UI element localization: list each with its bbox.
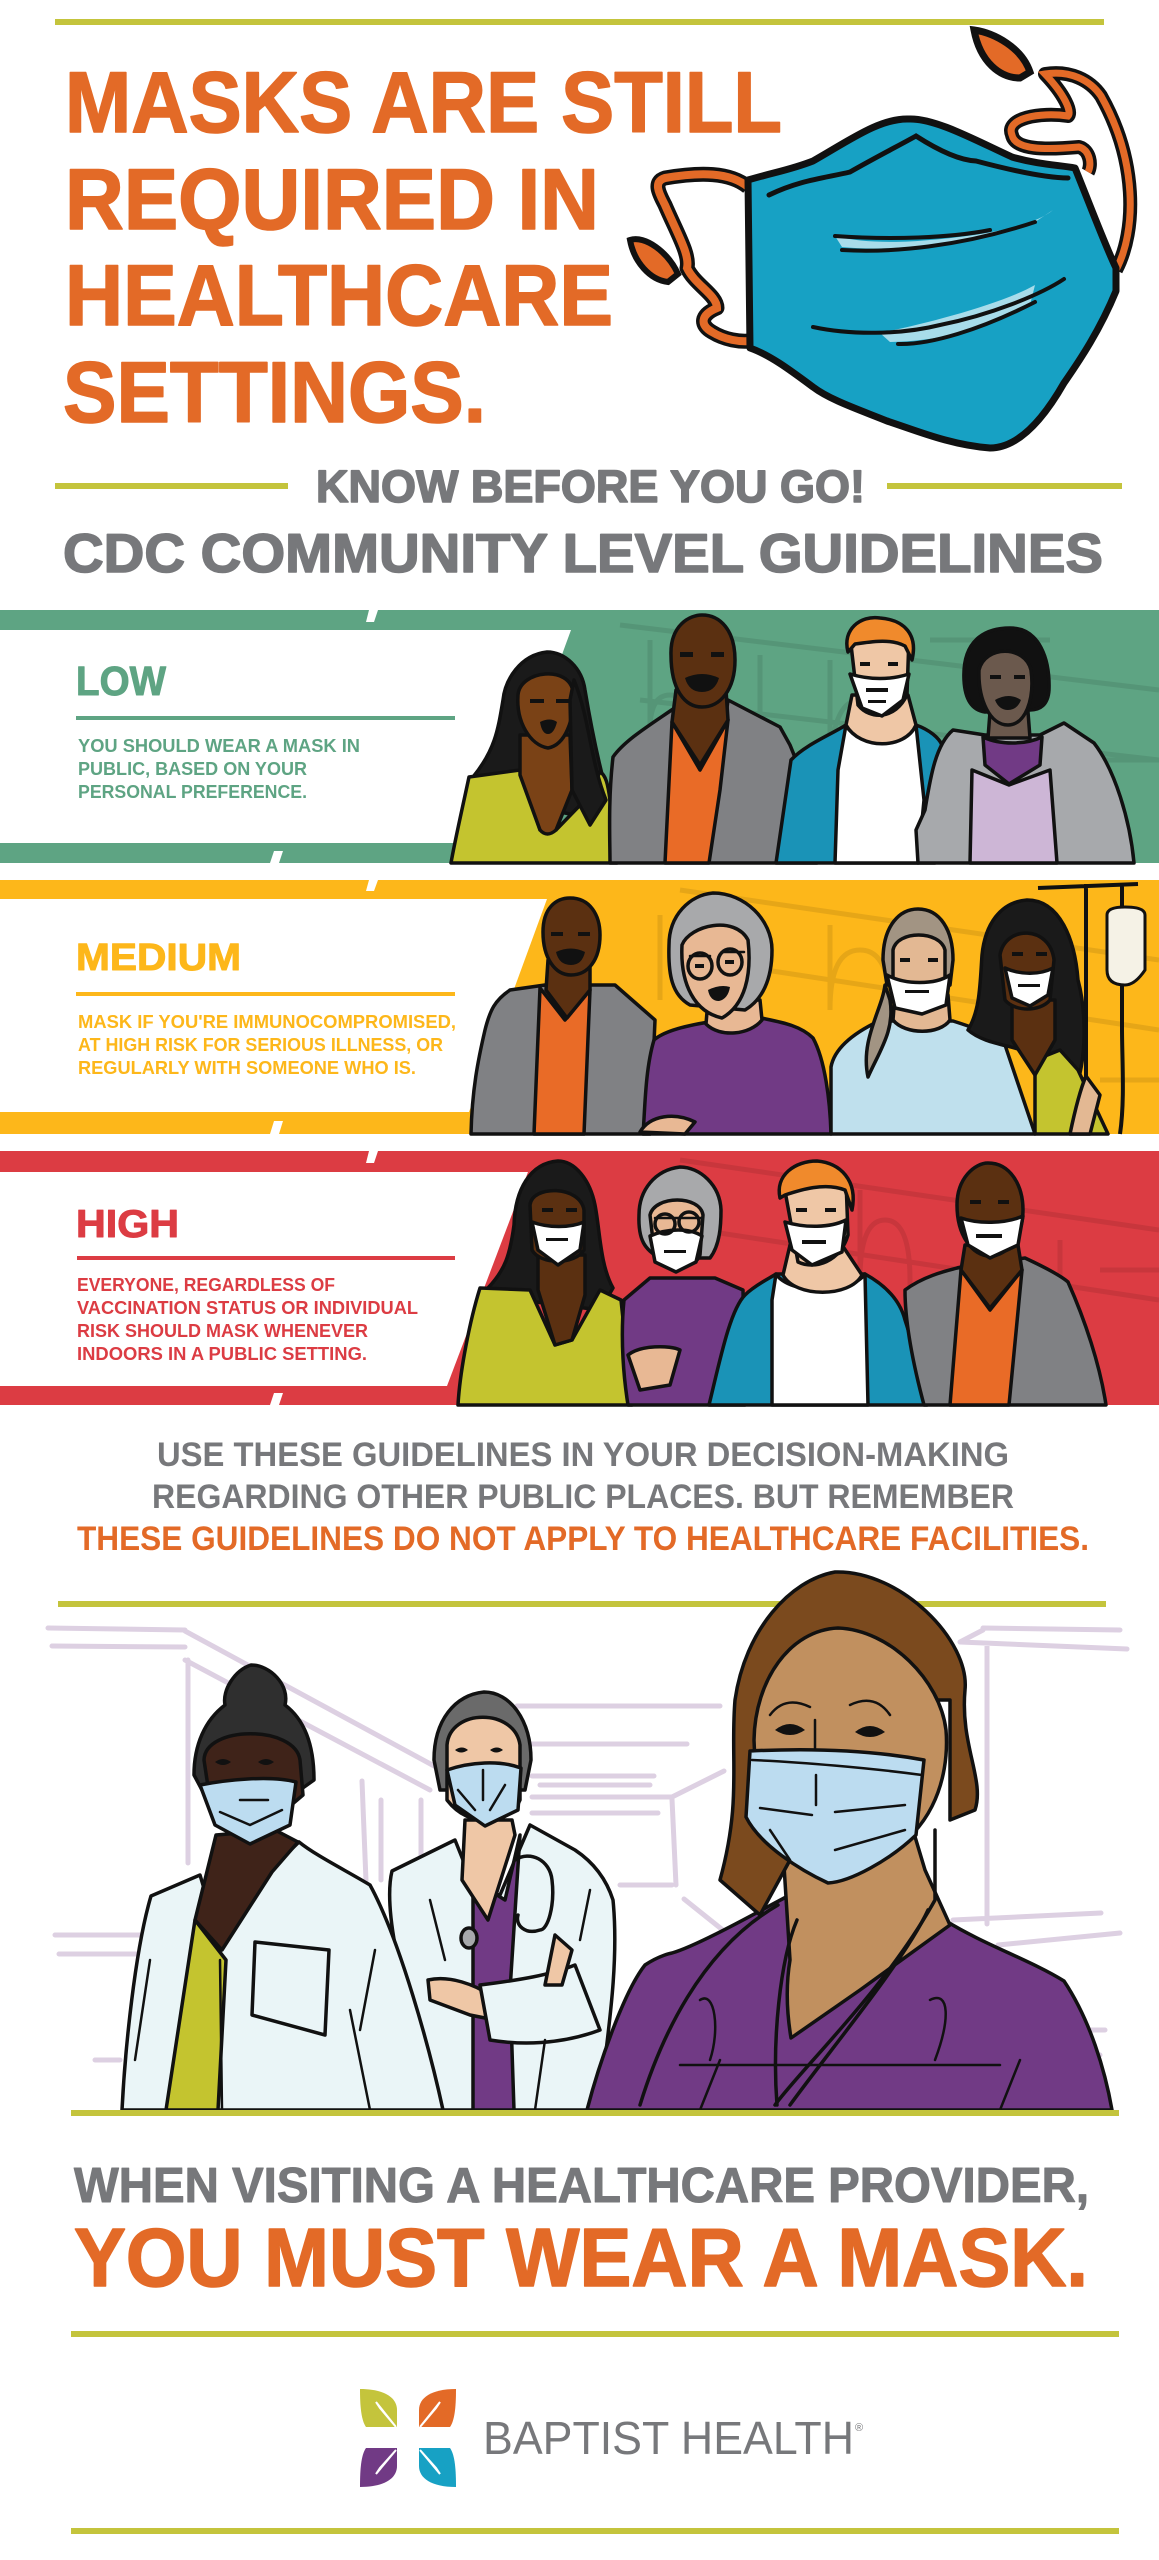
title: SETTINGS. [63,345,486,441]
background: hospital sketch [48,1628,1127,2060]
text: low guidance: YOU SHOULD WEAR A MASK IN [78,735,360,756]
panel: healthcare workers illustration [48,1572,1127,2110]
heading: LOW: LOW [76,658,166,704]
text: high guidance: EVERYONE, REGARDLESS OF [77,1274,335,1295]
text: medium guidance: REGULARLY WITH SOMEONE WHO IS. [78,1057,416,1078]
text: use these guidelines note: REGARDING OTHER PUBLIC PLACES. BUT REMEMBER [152,1478,1014,1516]
text: high guidance: RISK SHOULD MASK WHENEVER [77,1320,368,1341]
icon: blue face mask [630,30,1130,448]
person: older woman with glasses [640,893,831,1134]
person: nurse in purple scrubs [587,1572,1112,2110]
person: woman with long hair and mask [968,900,1108,1134]
text: medium guidance: AT HIGH RISK FOR SERIOUS ILLNESS, OR [78,1034,443,1055]
person: man in gray jacket [471,898,655,1134]
logo: Baptist Health [360,2389,863,2487]
title: REQUIRED IN [65,152,599,248]
person: older woman with glasses and mask [622,1167,745,1405]
text: medium guidance [78,1011,456,1078]
divider with heading: know before you go [55,461,1122,512]
heading: CDC community level guidelines: CDC COMMUNITY LEVEL GUIDELINES [63,522,1103,584]
text: high guidance: VACCINATION STATUS OR INDIVIDUAL [77,1297,418,1318]
person: man in gray jacket and orange shirt [610,615,817,863]
heading: when visiting a healthcare provider: WHEN VISITING A HEALTHCARE PROVIDER, [74,2159,1089,2213]
divider with heading: know before you go: KNOW BEFORE YOU GO! [316,461,865,512]
text: use these guidelines note: USE THESE GUIDELINES IN YOUR DECISION-MAKING [157,1436,1009,1474]
title: MASKS ARE STILL [65,55,782,151]
title [63,55,782,441]
logo: Baptist Health: BAPTIST HEALTH [483,2412,854,2464]
person: doctor with stethoscope [390,1692,615,2110]
heading: HIGH: HIGH [76,1203,179,1246]
title: HEALTHCARE [65,248,613,344]
text: medium guidance: MASK IF YOU'RE IMMUNOCOMPROMISED, [78,1011,456,1032]
text: use these guidelines note [77,1436,1089,1558]
person: red-haired man with mask [776,618,942,863]
panel: high level [0,1151,1159,1405]
heading: MEDIUM: MEDIUM [76,937,241,979]
text: low guidance: PERSONAL PREFERENCE. [78,781,307,802]
person: man in gray jacket with mask [905,1163,1106,1405]
panel: medium level [0,880,1159,1134]
text: use these guidelines note: THESE GUIDELINES DO NOT APPLY TO HEALTHCARE FACILITIES. [77,1520,1089,1558]
panel: low level [0,610,1159,863]
person: woman in yellow top [451,652,617,863]
text: low guidance [78,735,360,802]
text: high guidance: INDOORS IN A PUBLIC SETTING. [77,1343,367,1364]
text: high guidance [77,1274,418,1364]
person: woman in gray cardigan [916,628,1134,863]
logo: Baptist Health: ® [855,2422,863,2434]
heading: you must wear a mask: YOU MUST WEAR A MASK. [74,2211,1088,2304]
person: woman in yellow top with mask [458,1161,632,1405]
person: doctor with yellow shirt [122,1665,443,2110]
person: patient in blue gown with mask [831,909,1035,1134]
person: red-haired man in teal cardigan with mask [709,1161,927,1405]
icon: IV pole and bag [1038,884,1145,1134]
text: low guidance: PUBLIC, BASED ON YOUR [78,758,307,779]
